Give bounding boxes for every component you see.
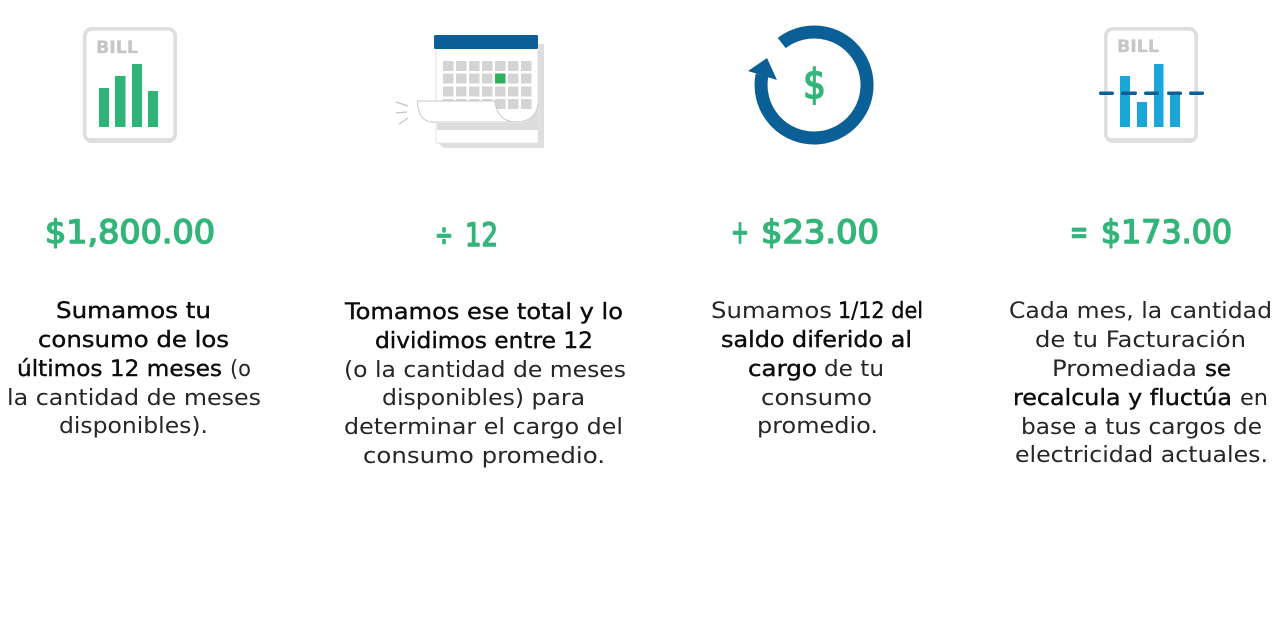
text: step 2 description [344,299,626,469]
amount: = $173.00: $173.00 [1101,213,1232,251]
text: step 4 description: electricidad actuales. [1015,442,1268,468]
amount: = $173.00: = [1070,213,1088,251]
amount: $1,800.00: $1,800.00 [45,213,215,251]
icon: green bill: BILL [96,38,138,58]
icon: blue bill with dashed average line: BILL [1117,37,1159,57]
amount: + $23.00: $23.00 [761,213,879,251]
text: step 3 description: saldo diferido al [721,327,912,353]
text: step 1 description: consumo de los [38,327,229,353]
text: step 4 description: base a tus cargos de [1021,414,1262,440]
text: step 4 description: se [1205,356,1231,382]
text: step 3 description: de tu [824,356,884,382]
icon: calendar with turning page [396,35,544,148]
text: step 1 description [7,298,261,439]
text: step 2 description: (o la cantidad de meses [344,357,626,383]
text: step 2 description: Tomamos ese total y lo [344,299,623,325]
text: step 1 description: Sumamos tu [56,298,211,324]
amount: + $23.00: + [731,213,749,251]
text: step 1 description: disponibles). [59,413,208,439]
text: step 2 description: consumo promedio. [363,443,605,469]
panel: step 1 total consumption [7,29,261,439]
text: step 3 description [711,298,923,439]
text: step 4 description: Promediada [1052,356,1197,382]
text: step 4 description: Cada mes, la cantidad [1009,298,1272,324]
panel: step 2 divide by twelve [344,35,626,469]
panel: step 4 monthly recalculation [1009,29,1272,468]
icon: blue bill with dashed average line [1099,29,1204,141]
icon: circular arrow with dollar sign [748,32,867,138]
text: step 1 description: (o [230,356,251,382]
amount: ÷ 12: 12 [465,216,498,254]
text: step 3 description: cargo [748,356,817,382]
text: step 4 description [1009,298,1272,468]
text: step 4 description: en [1240,385,1268,411]
text: step 4 description: recalcula y fluctúa [1013,385,1232,411]
text: step 4 description: de tu Facturación [1035,327,1246,353]
text: step 3 description: 1/12 del [838,298,923,324]
text: step 1 description: últimos 12 meses [17,356,222,382]
text: step 3 description: Sumamos [711,298,832,324]
icon: circular arrow with dollar sign: $ [803,60,826,108]
text: step 2 description: dividimos entre 12 [375,328,593,354]
text: step 2 description: determinar el cargo del [344,414,623,440]
text: step 1 description: la cantidad de meses [7,385,261,411]
text: step 3 description: promedio. [757,413,878,439]
icon: green bill [85,29,175,141]
amount: ÷ 12 [435,216,498,254]
panel: step 3 deferred balance [711,32,923,439]
text: step 3 description: consumo [761,385,872,411]
amount: ÷ 12: ÷ [435,216,453,254]
text: step 2 description: disponibles) para [382,385,585,411]
